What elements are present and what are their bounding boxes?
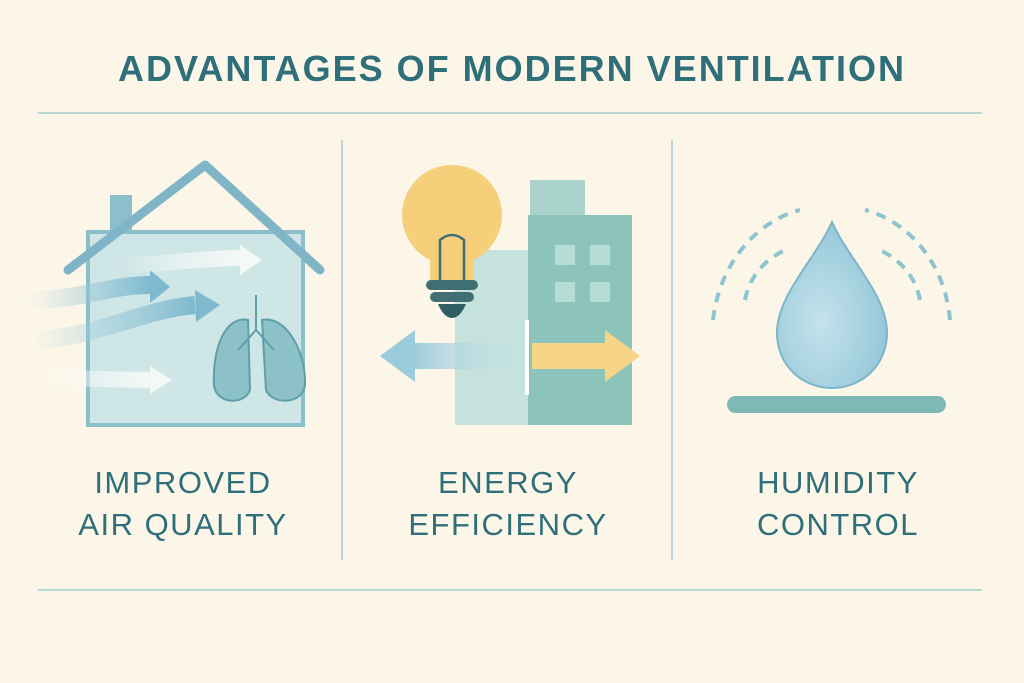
heading: energy efficiency: ENERGY xyxy=(438,465,578,500)
icon: building xyxy=(455,180,632,425)
icon: water drop xyxy=(713,210,950,413)
heading: humidity control: HUMIDITY xyxy=(757,465,919,500)
panel: improved air quality xyxy=(30,165,320,542)
panel: humidity control xyxy=(713,210,950,542)
arrow: heat out xyxy=(380,330,520,382)
panel: energy efficiency xyxy=(380,165,640,542)
icon: light bulb xyxy=(402,165,502,318)
icon: house with airflow and lungs xyxy=(30,165,320,425)
panel: energy efficiency: EFFICIENCY xyxy=(408,507,608,542)
icon: lungs xyxy=(214,295,305,401)
panel: humidity control: CONTROL xyxy=(757,507,919,542)
heading: improved air quality: IMPROVED xyxy=(94,465,272,500)
title: ADVANTAGES OF MODERN VENTILATION xyxy=(118,48,906,89)
arrow: energy in xyxy=(532,330,640,382)
panel: improved air quality: AIR QUALITY xyxy=(78,507,288,542)
